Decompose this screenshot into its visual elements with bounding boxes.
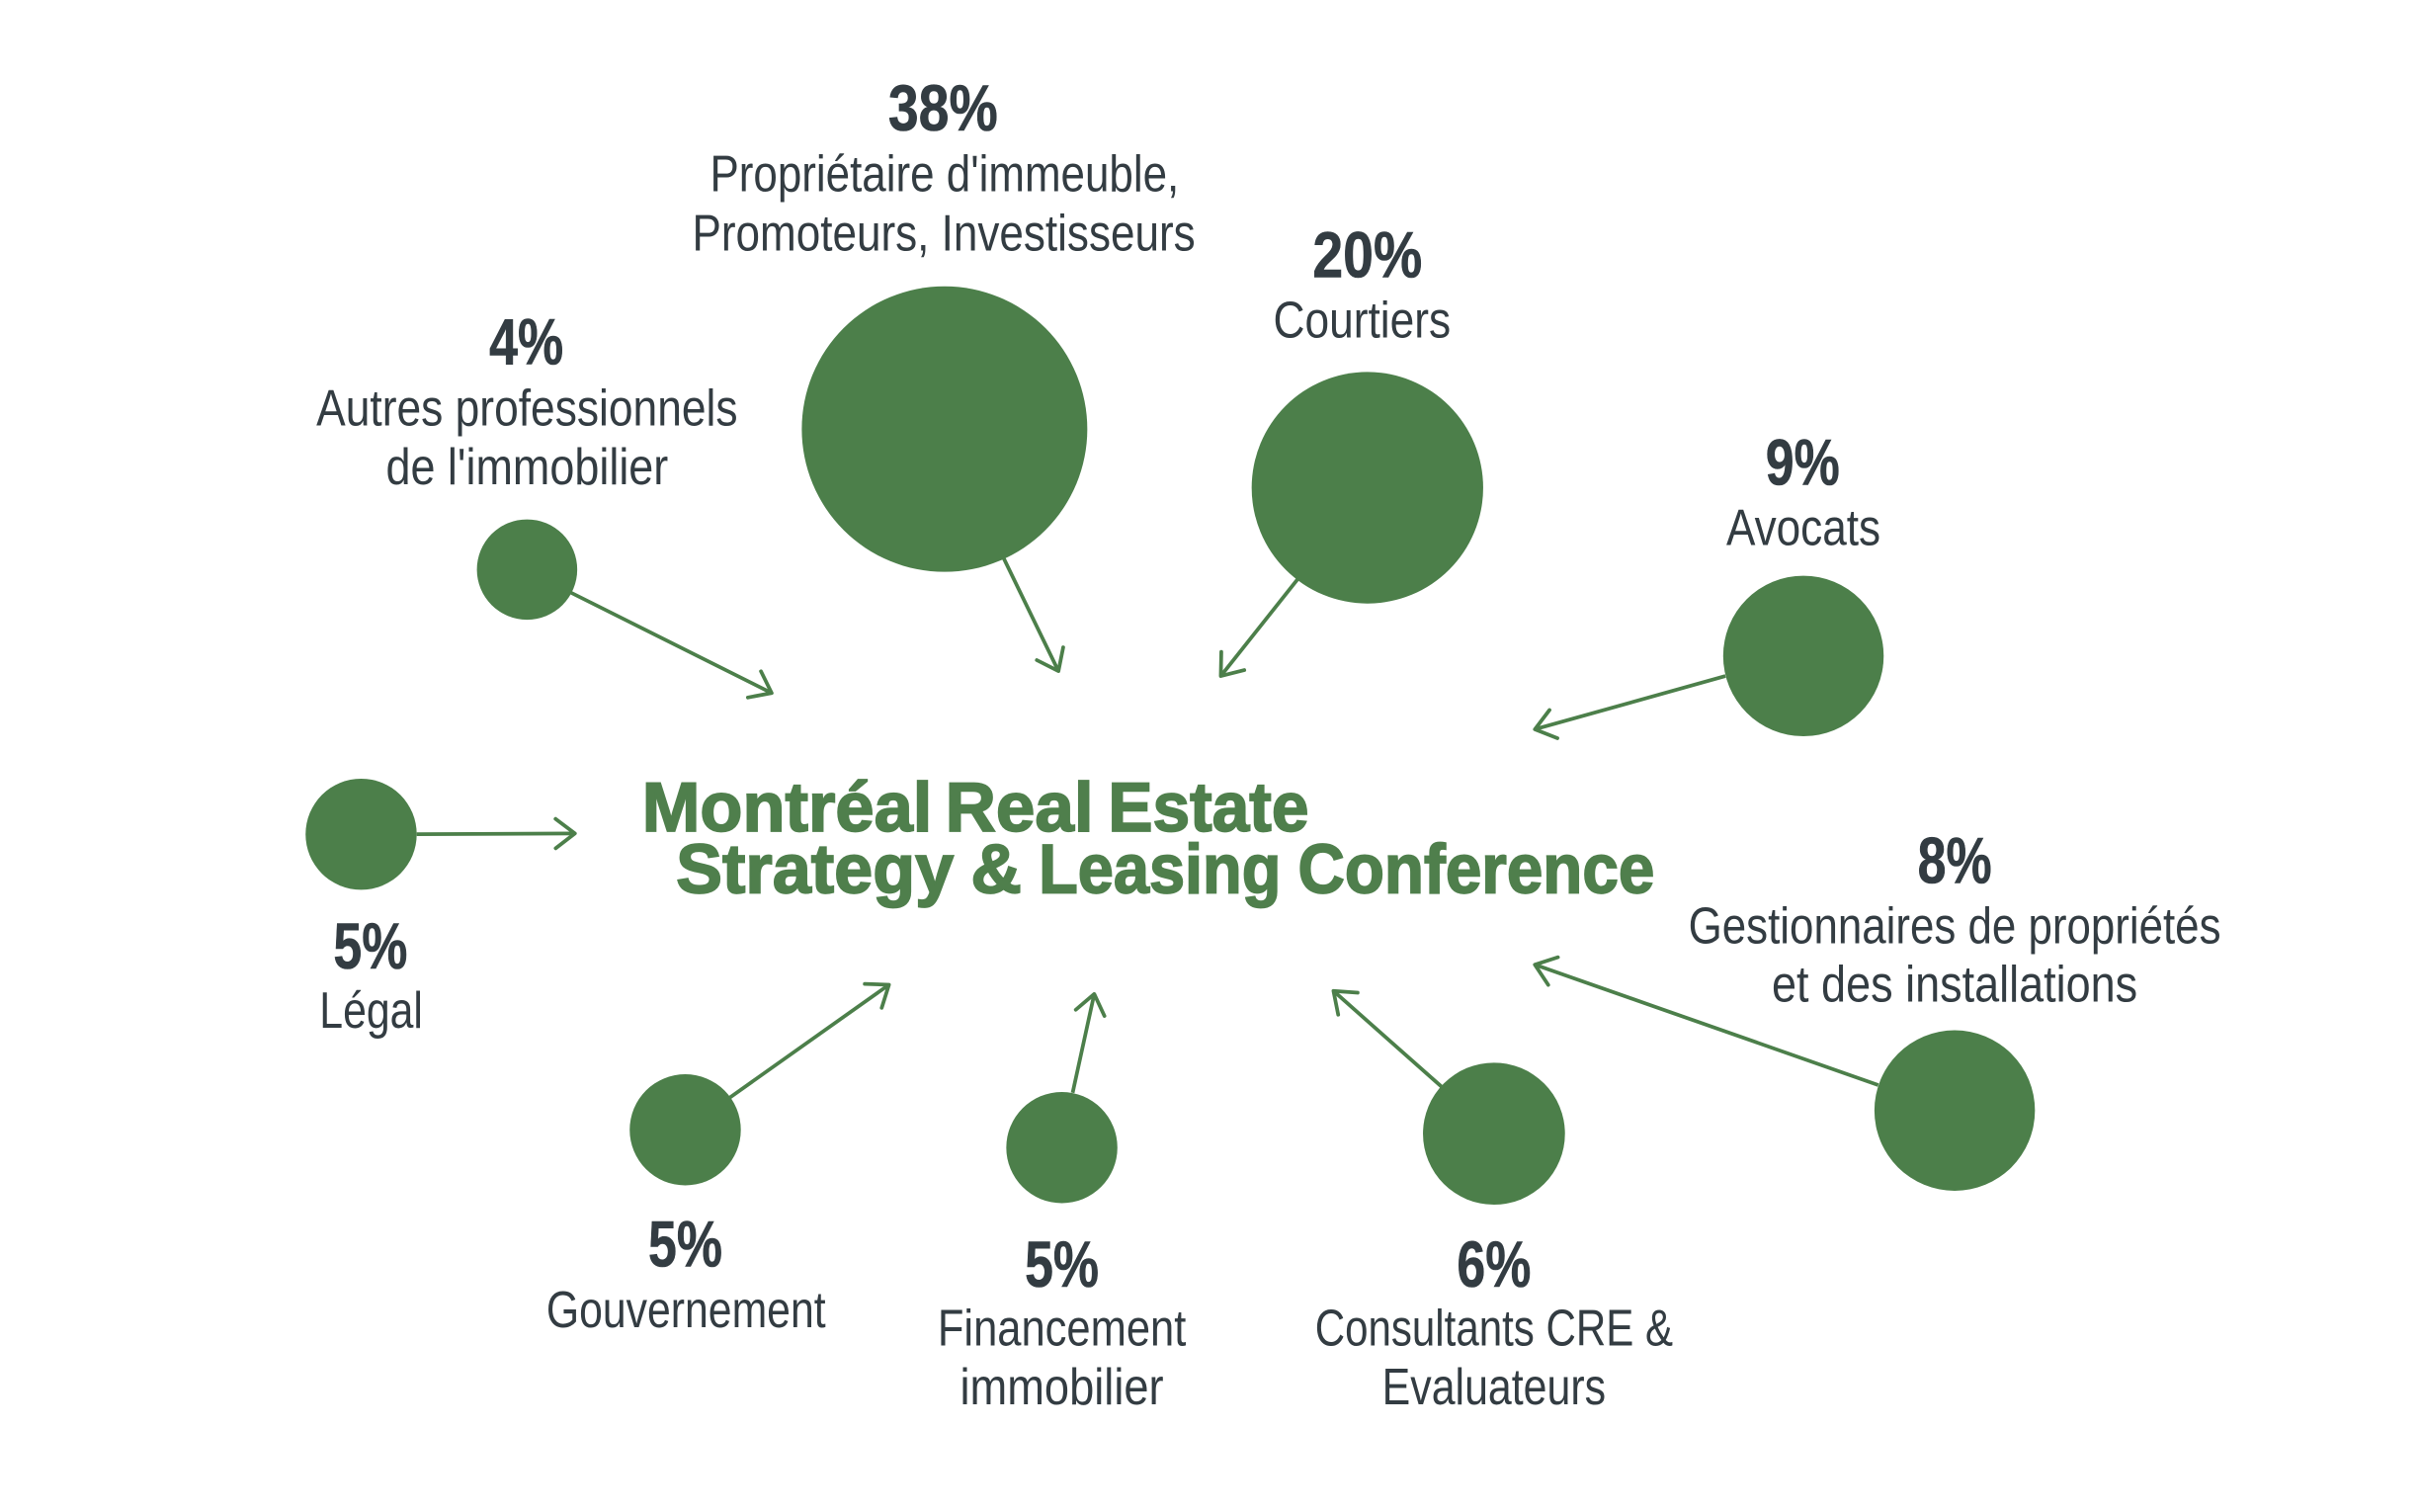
- title: Conference: [1298, 830, 1654, 908]
- segment: 4% other real estate professionals: [316, 306, 772, 693]
- segment: 5% real estate finance: immobilier: [960, 1358, 1164, 1415]
- segment: 38% owners: Promoteurs, Investisseurs: [692, 204, 1196, 261]
- title: &: [970, 830, 1022, 908]
- segment: 6% CRE consultants and appraisers: [1315, 991, 1673, 1415]
- segment: 5% government: 5%: [648, 1209, 722, 1281]
- segment: 4% other real estate professionals: Autres professionnels: [316, 379, 738, 437]
- segment: 9% lawyers: [1535, 426, 1883, 736]
- segment: 20% brokers: [1220, 218, 1483, 676]
- title: Montréal: [642, 768, 932, 846]
- segment: 5% government: Gouvernement: [546, 1281, 826, 1338]
- title: Estate: [1108, 768, 1308, 846]
- segment: 9% lawyers: 9%: [1766, 426, 1840, 498]
- segment: 8% property managers: Gestionnaires de propriétés: [1689, 896, 2221, 954]
- segment: 20% brokers: Courtiers: [1274, 292, 1451, 349]
- segment: 38% owners: [692, 72, 1196, 671]
- segment: 9% lawyers: Avocats: [1726, 498, 1880, 555]
- segment: 8% property managers: et des installations: [1772, 956, 2137, 1013]
- segment: 5% legal: [305, 779, 575, 1039]
- segment: 20% brokers: 20%: [1312, 218, 1422, 291]
- segment: 38% owners: Propriétaire d'immeuble,: [709, 144, 1179, 202]
- segment: 5% government: [546, 984, 889, 1338]
- segment: 6% CRE consultants and appraisers: 6%: [1457, 1228, 1531, 1301]
- title: [642, 768, 1654, 908]
- segment: 38% owners: 38%: [888, 72, 998, 144]
- segment: 5% legal: Légal: [319, 981, 423, 1039]
- segment: 5% real estate finance: 5%: [1025, 1228, 1099, 1301]
- title: Strategy: [676, 830, 954, 908]
- segment: 8% property managers: 8%: [1918, 824, 1992, 896]
- segment: 6% CRE consultants and appraisers: Evaluateurs: [1382, 1358, 1606, 1415]
- segment: 8% property managers: [1535, 824, 2221, 1191]
- segment: 5% real estate finance: [938, 994, 1186, 1415]
- segment: 5% real estate finance: Financement: [938, 1300, 1186, 1357]
- segment: 6% CRE consultants and appraisers: Consultants CRE &: [1315, 1300, 1673, 1357]
- segment: 4% other real estate professionals: de l'immobilier: [385, 438, 668, 495]
- segment: 5% legal: 5%: [333, 910, 407, 982]
- title: Leasing: [1039, 830, 1281, 908]
- title: Real: [946, 768, 1094, 846]
- segment: 4% other real estate professionals: 4%: [489, 306, 563, 378]
